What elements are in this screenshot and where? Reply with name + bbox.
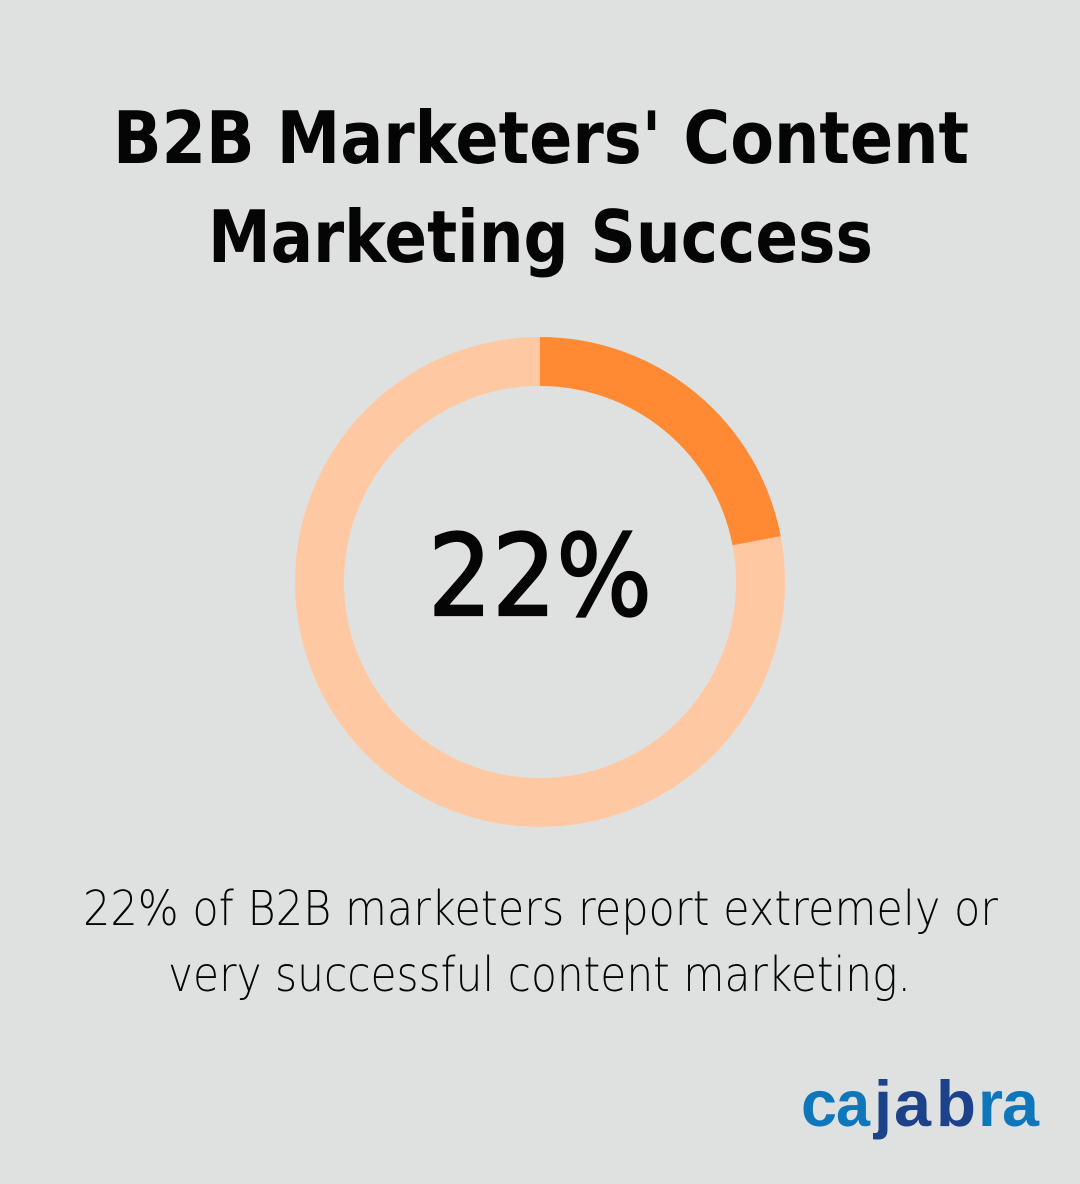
donut highlighted segment: [540, 362, 757, 541]
description text: 22% of B2B marketers report extremely or: [83, 881, 998, 937]
donut chart: 22 percent: [320, 362, 760, 802]
logo: cajabra: [801, 1067, 1040, 1140]
title: Marketing Success: [208, 195, 873, 279]
logo: cajabra: a: [894, 1067, 932, 1140]
logo: cajabra: a: [836, 1067, 871, 1140]
donut center value: 22%: [428, 512, 652, 642]
title: B2B Marketers' Content: [113, 96, 969, 180]
logo: cajabra: j: [872, 1067, 892, 1140]
logo: cajabra: c: [801, 1067, 837, 1140]
donut track: [320, 362, 760, 802]
description text: [83, 881, 998, 1003]
logo: cajabra: a: [1002, 1067, 1040, 1140]
logo: cajabra: b: [936, 1067, 976, 1140]
logo: cajabra: r: [978, 1067, 1003, 1140]
description text: very successful content marketing.: [168, 947, 911, 1003]
title: [113, 96, 969, 279]
